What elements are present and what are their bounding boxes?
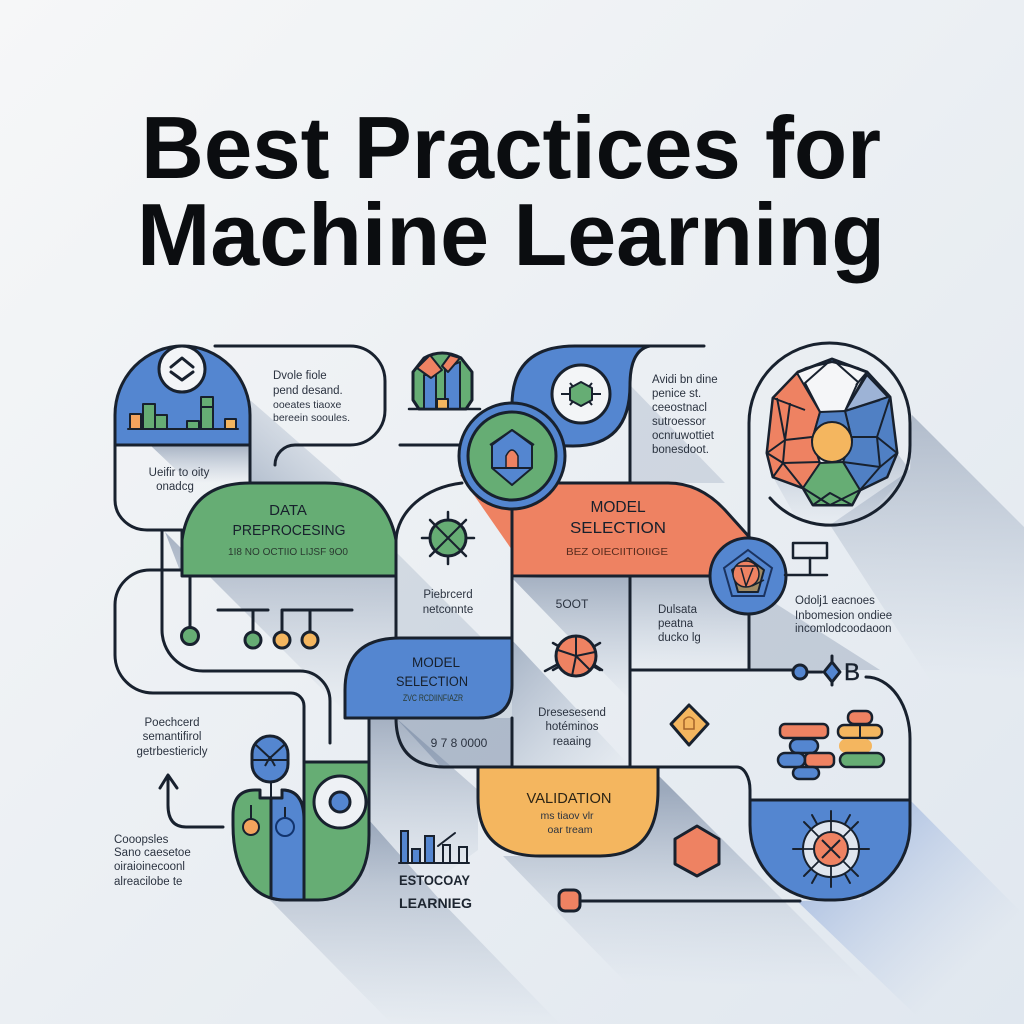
panel: validation: [478, 767, 658, 856]
text block: speech note: ooeates tiaoxe: [273, 399, 341, 411]
icon: stacked blocks: [778, 711, 884, 779]
panel: model selection orange: [460, 475, 752, 576]
text block: lower center note: hotéminos: [545, 721, 599, 733]
panel: data preprocessing: PREPROCESING: [232, 522, 346, 539]
icon: network nodes and B: B: [844, 659, 860, 686]
icon: figure with mouse head and body: [233, 736, 369, 900]
text: soot label: 5OOT: [556, 597, 589, 611]
panel: data preprocessing: [182, 483, 396, 576]
text block: lower left note: Cooopsles: [114, 834, 169, 846]
text block: left note: getrbestiericly: [137, 746, 208, 758]
text block: speech note: pend desand.: [273, 385, 343, 397]
icon: network nodes and B: [793, 656, 860, 686]
icon: chevrons circle: [159, 346, 205, 392]
text block: left note: Poechcerd: [145, 717, 199, 729]
text block: center note: Piebrcerd: [423, 589, 473, 601]
text block: lower center note: reaaing: [553, 736, 591, 748]
text block: lower left note: oiraioinecoonl: [114, 861, 185, 873]
label: estocoay learnieg: [399, 872, 472, 911]
panel: validation: VALIDATION: [526, 790, 612, 807]
text block: top right note: ceeostnacl: [652, 402, 707, 414]
text block: lower left note: alreacilobe te: [114, 876, 182, 888]
text block: top right note: penice st.: [652, 388, 701, 400]
arrow: [160, 775, 223, 827]
text block: lower left note: Sano caesetoe: [114, 847, 191, 859]
icon: monitor: [785, 543, 827, 575]
text: numeric label: 9 7 8 0000: [431, 736, 488, 750]
icon: bar chart glyph: [399, 831, 469, 863]
label: estocoay learnieg: LEARNIEG: [399, 895, 472, 911]
text block: narrow note: peatna: [658, 618, 694, 630]
title: [137, 98, 885, 284]
icon: yellow diamond: [671, 705, 708, 745]
title: Best Practices for: [141, 98, 881, 197]
icon: polyhedron on small blue hub: [710, 538, 786, 614]
panel: model selection blue: SELECTION: [396, 674, 468, 689]
card caption: onadcg: [156, 481, 194, 493]
panel: model selection orange: BEZ OIECIITIOIIGE: [566, 547, 668, 558]
panel: data preprocessing: 1I8 NO OCTIIO LIJSF 9O0: [228, 547, 348, 558]
text block: left note: semantifirol: [143, 731, 201, 743]
text block: top right note: ocnruwottiet: [652, 430, 715, 442]
text block: center note: netconnte: [423, 604, 473, 616]
icon: orange hexagon: [675, 826, 719, 876]
panel: top-left blue dashboard card: [115, 346, 250, 576]
text block: narrow note: ducko lg: [658, 632, 701, 644]
card caption: Ueifir to oity: [149, 467, 209, 479]
text block: speech note: bereein sooules.: [273, 412, 350, 424]
connector lines: [115, 343, 910, 901]
panel: validation: ms tiaov vlr: [540, 810, 594, 822]
background diagonal shadows: [150, 385, 1024, 1024]
icon: green spoke wheel: [422, 512, 474, 564]
icon: orange square node: [559, 890, 580, 911]
bar chart: [128, 397, 238, 429]
icon: blue S-shape with hub: [512, 346, 650, 446]
panel: model selection blue: ZVC RCDIINFIAZR: [403, 693, 463, 703]
icon: orange spoke wheel: [545, 636, 602, 676]
icon: large green hub: [459, 403, 565, 509]
title: Machine Learning: [137, 185, 885, 284]
panel: model selection orange: SELECTION: [570, 520, 666, 537]
text block: top right note: sutroessor: [652, 416, 706, 428]
panel: model selection blue: [345, 638, 512, 718]
text block: top right note: bonesdoot.: [652, 444, 709, 456]
text block: right note: Inbomesion ondiee: [795, 610, 892, 622]
text block: top right note: Avidi bn dine: [652, 374, 718, 386]
panel: blue target card: [750, 800, 910, 900]
icon: small geometric dome: [409, 353, 480, 409]
text block: speech note: Dvole fiole: [273, 370, 327, 382]
panel: validation: oar tream: [548, 824, 593, 836]
panel: data preprocessing: DATA: [269, 502, 307, 519]
tree nodes: [182, 628, 318, 648]
icon: large polyhedron: [767, 359, 897, 505]
label: estocoay learnieg: ESTOCOAY: [399, 872, 471, 888]
text block: lower center note: Dresesesend: [538, 707, 606, 719]
text block: right note: incomlodcoodaoon: [795, 623, 892, 635]
panel: model selection orange: MODEL: [590, 499, 646, 516]
panel: model selection blue: MODEL: [412, 655, 460, 670]
text block: narrow note: Dulsata: [658, 604, 698, 616]
text block: right note: Odolj1 eacnoes: [795, 595, 875, 607]
